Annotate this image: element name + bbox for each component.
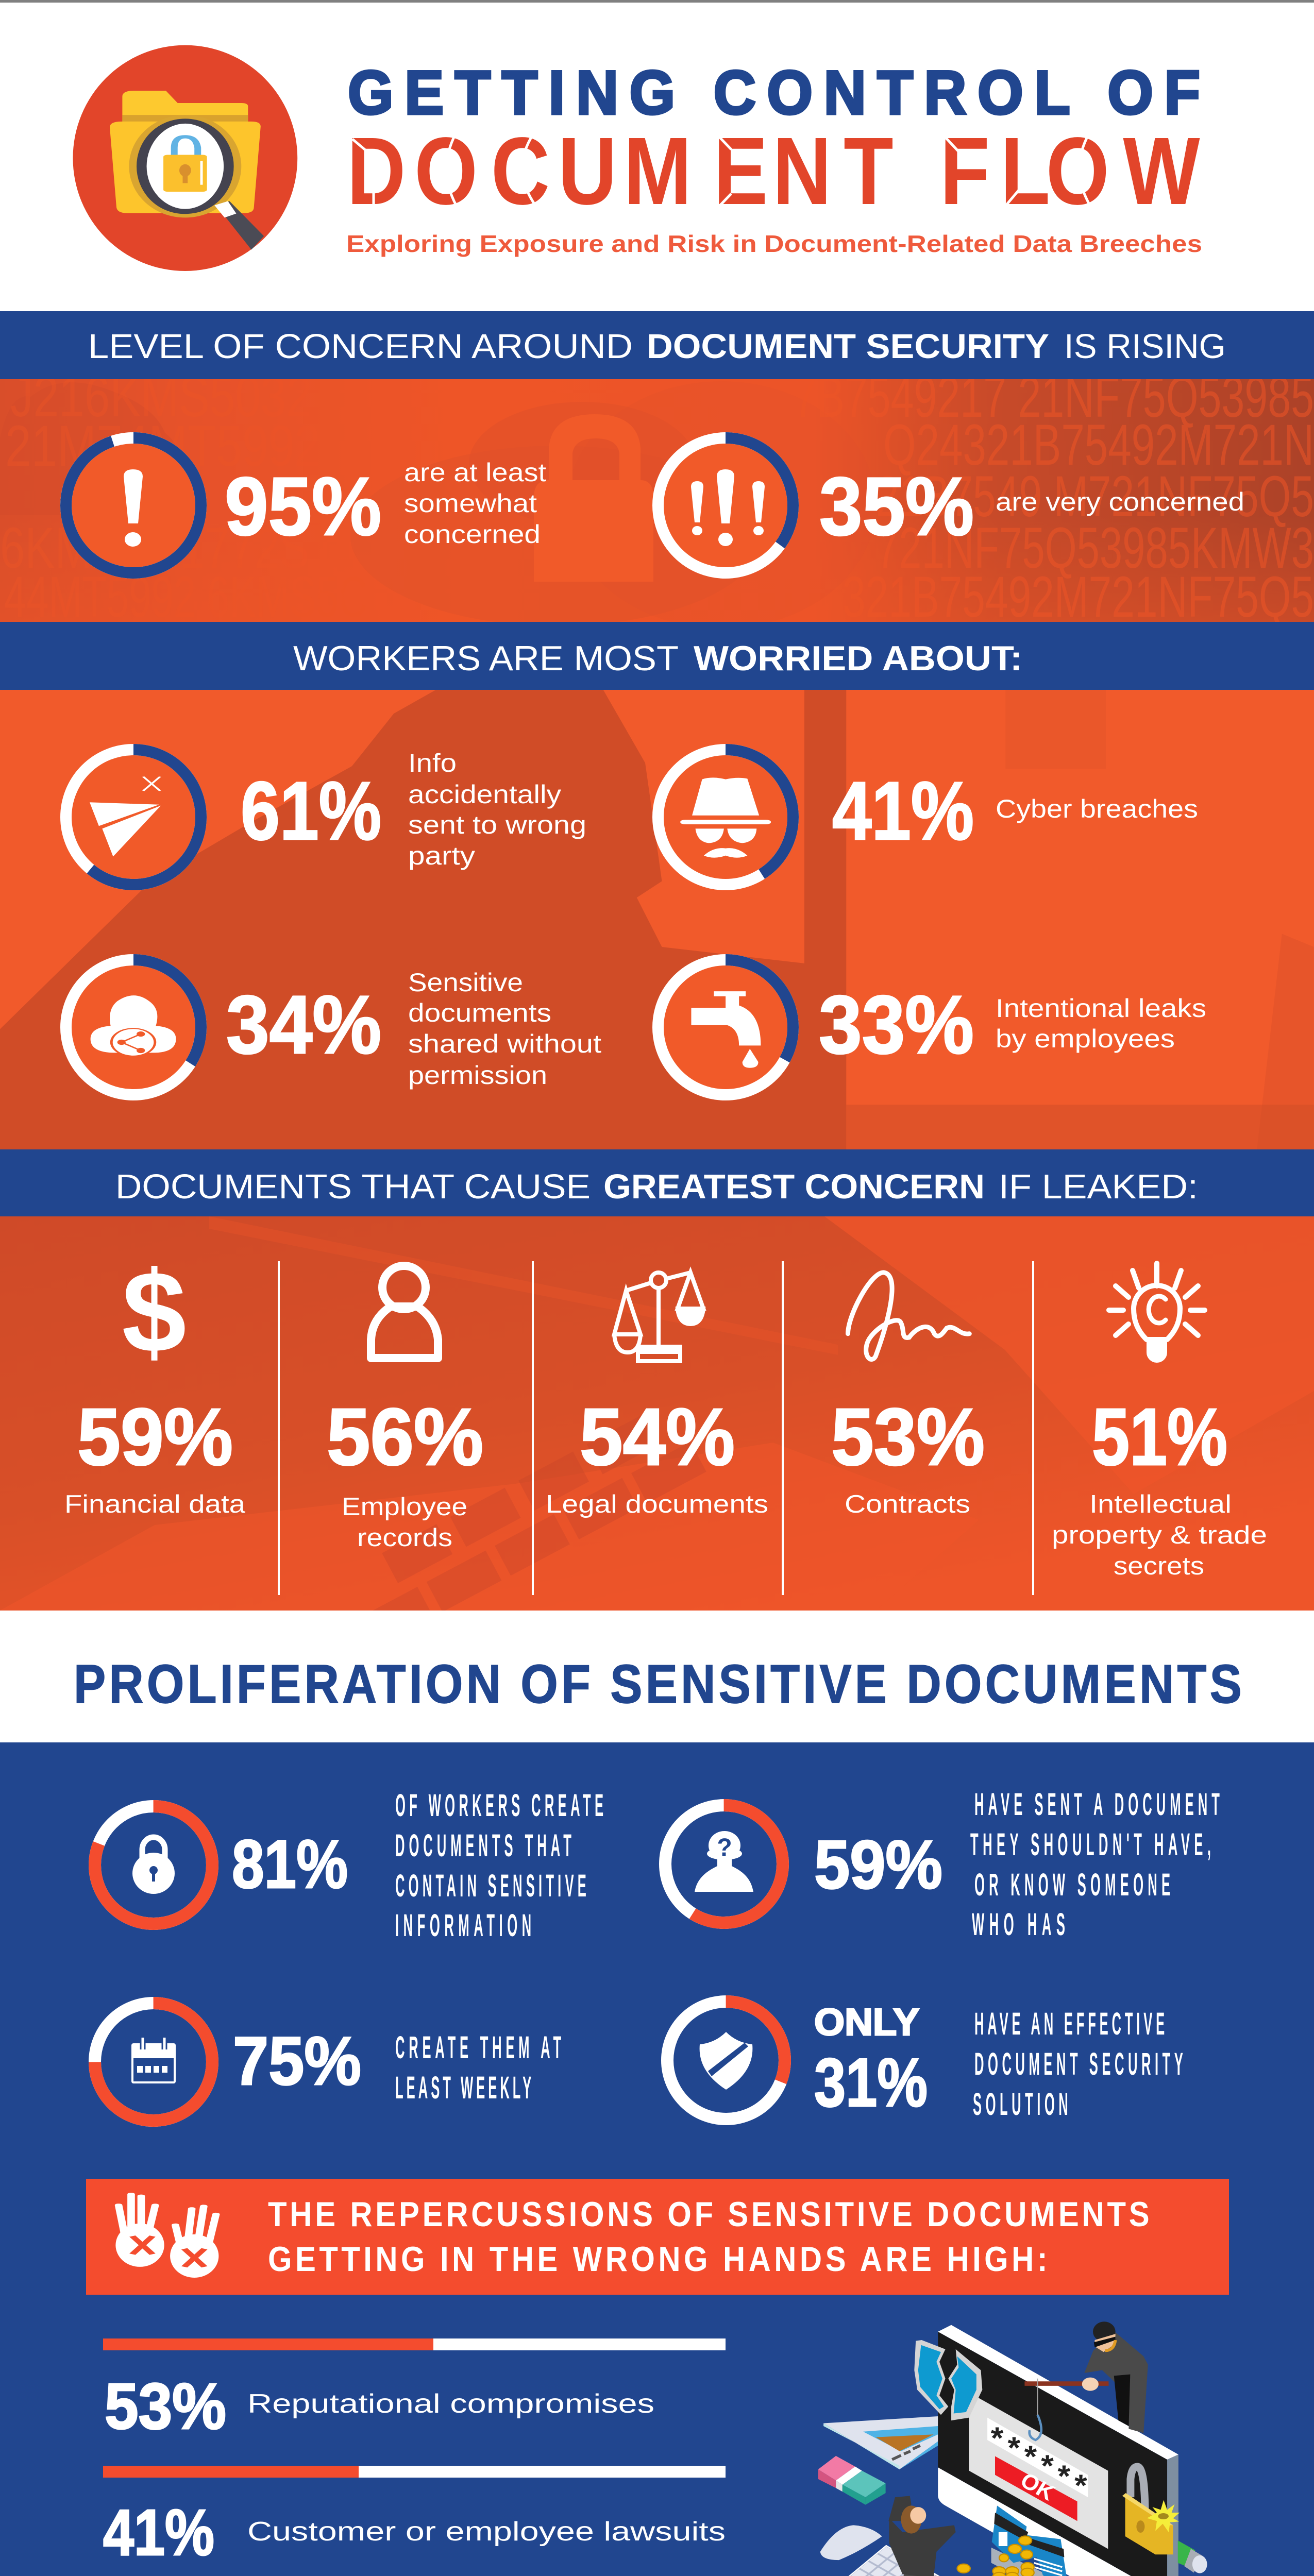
label: by employees <box>996 1024 1175 1053</box>
stat: 33 percent intentional leaks <box>652 954 1206 1100</box>
band: level of concern heading <box>0 311 1314 379</box>
set square <box>823 2416 938 2469</box>
panel: concern level background <box>0 364 1314 629</box>
percent: 61% <box>241 765 381 857</box>
panel: concern level background: J216KMS5032 <box>10 364 312 429</box>
monitor: * <box>1057 2459 1070 2494</box>
bar: 41 percent: 41% <box>103 2496 214 2569</box>
label: concerned <box>404 520 541 549</box>
monitor: * <box>1074 2468 1087 2503</box>
pencil <box>1178 2540 1207 2573</box>
eraser <box>818 2456 886 2505</box>
band: workers worried heading: WORRIED ABOUT: <box>694 639 1022 678</box>
broken shield <box>914 2340 982 2420</box>
label: property & trade <box>1052 1521 1267 1549</box>
banner text <box>268 2194 1150 2279</box>
column: financial data <box>64 1247 246 1518</box>
band: level of concern heading: LEVEL OF CONCERN AROUND <box>88 327 633 366</box>
label: Financial data <box>64 1490 246 1518</box>
cash and coins <box>957 2536 1074 2576</box>
percent: 35% <box>819 460 974 552</box>
bar: 41 percent <box>103 2466 726 2569</box>
monitor <box>938 2325 1178 2576</box>
top rule <box>0 0 1314 3</box>
icon: hands with crosses <box>114 2193 220 2278</box>
percent: 81% <box>232 1826 348 1903</box>
column: legal documents <box>546 1273 768 1518</box>
percent: 59% <box>814 1827 942 1903</box>
column: contracts <box>831 1273 985 1518</box>
label: shared without <box>408 1029 601 1058</box>
label: Intellectual <box>1089 1490 1232 1518</box>
band: documents heading: IF LEAKED: <box>999 1167 1198 1206</box>
illustration: hacked computer <box>818 2321 1207 2576</box>
label: documents <box>408 998 551 1027</box>
bar: 53 percent: 53% <box>105 2370 226 2443</box>
monitor: OK <box>1016 2468 1059 2505</box>
monitor stand <box>991 2548 1124 2576</box>
panel: documents of concern background <box>0 1216 1314 1611</box>
label: HAVE SENT A DOCUMENT <box>974 1787 1220 1822</box>
percent: 34% <box>226 978 381 1071</box>
monitor: * <box>1007 2431 1020 2465</box>
panel: workers worried background <box>0 690 1314 1151</box>
label <box>395 1788 603 1943</box>
band: documents heading: DOCUMENTS THAT CAUSE <box>115 1167 591 1206</box>
label: THEY SHOULDN'T HAVE, <box>970 1827 1211 1862</box>
label: Info <box>408 749 457 777</box>
logo: folder and magnifying glass <box>73 45 297 271</box>
stat: 81 percent <box>95 1788 603 1943</box>
percent: 95% <box>225 460 381 552</box>
padlock <box>1122 2467 1180 2554</box>
column: intellectual property <box>1052 1263 1267 1580</box>
percent: 33% <box>819 978 974 1071</box>
icon: dollar: $ <box>122 1247 187 1377</box>
ring and shield icon <box>667 2002 785 2119</box>
ring and spy icon <box>652 744 799 890</box>
banner text: GETTING IN THE WRONG HANDS ARE HIGH: <box>268 2239 1048 2279</box>
column: employee records <box>327 1266 483 1552</box>
subtitle: Exploring Exposure and Risk in Document-Related Data Breeches <box>346 230 1202 257</box>
label: party <box>408 841 475 870</box>
band: workers worried heading <box>0 622 1314 690</box>
icon: person <box>371 1266 438 1358</box>
label: Employee <box>342 1493 467 1521</box>
ring and triple exclamation icon <box>652 432 799 579</box>
icon: light bulb with copyright <box>1109 1263 1205 1360</box>
label: LEAST WEEKLY <box>395 2070 531 2105</box>
only: ONLY <box>814 2002 919 2043</box>
label <box>404 458 546 549</box>
label: WHO HAS <box>972 1907 1065 1942</box>
mouse <box>820 2525 882 2560</box>
label <box>395 2030 561 2105</box>
ring and calendar icon <box>95 2003 212 2121</box>
label <box>408 749 586 870</box>
label: records <box>357 1524 452 1552</box>
label: sent to wrong <box>408 810 586 839</box>
monitor: * <box>991 2421 1003 2455</box>
label: Legal documents <box>546 1490 768 1518</box>
band: level of concern heading: IS RISING <box>1064 327 1226 366</box>
monitor: * <box>1041 2449 1054 2483</box>
keyboard <box>832 2546 1050 2576</box>
label: CREATE THEM AT <box>395 2030 561 2065</box>
label: secrets <box>1114 1552 1204 1580</box>
banner text: THE REPERCUSSIONS OF SENSITIVE DOCUMENTS <box>268 2194 1150 2234</box>
hacker <box>1024 2321 1148 2440</box>
percent: 59% <box>77 1392 233 1482</box>
label: OF WORKERS CREATE <box>395 1788 603 1823</box>
panel: proliferation blue background <box>0 1742 1314 2576</box>
heading: proliferation: PROLIFERATION OF SENSITIVE DOCUMENTS <box>74 1654 1242 1715</box>
label: INFORMATION <box>395 1908 531 1943</box>
panel: concern level background: 44MT5992 6KMS5C <box>4 565 367 629</box>
percent: 75% <box>233 2023 361 2099</box>
label: HAVE AN EFFECTIVE <box>974 2006 1165 2041</box>
stat: 75 percent <box>95 2003 561 2121</box>
ring and cloud share icon <box>60 954 207 1100</box>
percent: 56% <box>327 1392 483 1482</box>
label: are at least <box>404 458 546 487</box>
callout: repercussions banner <box>86 2179 1229 2295</box>
label: DOCUMENTS THAT <box>395 1828 571 1863</box>
label <box>342 1493 467 1552</box>
label: are very concerned <box>996 487 1244 516</box>
bar: 53 percent: Reputational compromises <box>247 2389 654 2419</box>
stat: 41 percent cyber breaches <box>652 744 1198 890</box>
stat: 95 percent somewhat concerned <box>60 432 546 579</box>
label: somewhat <box>404 489 537 518</box>
icon: signature <box>848 1273 969 1360</box>
standing man <box>888 2496 956 2576</box>
label: permission <box>408 1061 547 1090</box>
ring and paper plane icon <box>60 744 207 890</box>
label <box>1052 1490 1267 1580</box>
percent: 51% <box>1092 1392 1227 1482</box>
ring and lock icon <box>95 1806 212 1924</box>
stat: only 31 percent <box>667 2002 1183 2122</box>
monitor: * <box>1024 2439 1037 2474</box>
label: OR KNOW SOMEONE <box>974 1867 1170 1902</box>
band: documents heading <box>0 1149 1314 1216</box>
label <box>408 968 601 1090</box>
label: CONTAIN SENSITIVE <box>395 1868 586 1903</box>
bar: 41 percent: Customer or employee lawsuits <box>247 2517 726 2547</box>
label <box>970 1787 1220 1942</box>
label: Cyber breaches <box>996 794 1198 823</box>
label: accidentally <box>408 780 561 809</box>
label: DOCUMENT SECURITY <box>974 2046 1183 2081</box>
label: Sensitive <box>408 968 523 997</box>
panel: concern level background: 21M74MT5992 <box>5 414 321 478</box>
panel: concern level background: 6KM5 321772S <box>0 516 309 580</box>
ring and question person icon: ? <box>717 1834 732 1861</box>
ring and exclamation icon <box>60 432 207 579</box>
band: documents heading: GREATEST CONCERN <box>603 1167 985 1206</box>
ring and faucet icon <box>652 954 799 1100</box>
title line 2: DOCUMENT FLOW <box>347 117 1200 225</box>
header <box>73 45 1202 271</box>
label: SOLUTION <box>973 2087 1068 2122</box>
broken credit card <box>992 2505 1068 2576</box>
band: workers worried heading: WORKERS ARE MOST <box>293 639 679 678</box>
stat: 34 percent shared without permission <box>60 954 601 1100</box>
stat: 61 percent sent to wrong party <box>60 744 586 890</box>
ring and question person icon <box>665 1805 783 1923</box>
percent: 53% <box>831 1392 985 1482</box>
percent: 31% <box>814 2045 928 2121</box>
label: Intentional leaks <box>996 994 1206 1023</box>
icon: scales <box>614 1273 703 1361</box>
title line 1: GETTING CONTROL OF <box>348 58 1200 127</box>
percent: 41% <box>832 765 974 857</box>
stat: 59 percent <box>665 1787 1220 1942</box>
band: level of concern heading: DOCUMENT SECURITY <box>647 327 1049 366</box>
bar: 53 percent <box>103 2338 726 2443</box>
label <box>996 994 1206 1053</box>
label: Contracts <box>845 1490 970 1518</box>
label <box>973 2006 1183 2122</box>
stat: 35 percent very concerned <box>652 432 1244 579</box>
percent: 54% <box>580 1392 735 1482</box>
